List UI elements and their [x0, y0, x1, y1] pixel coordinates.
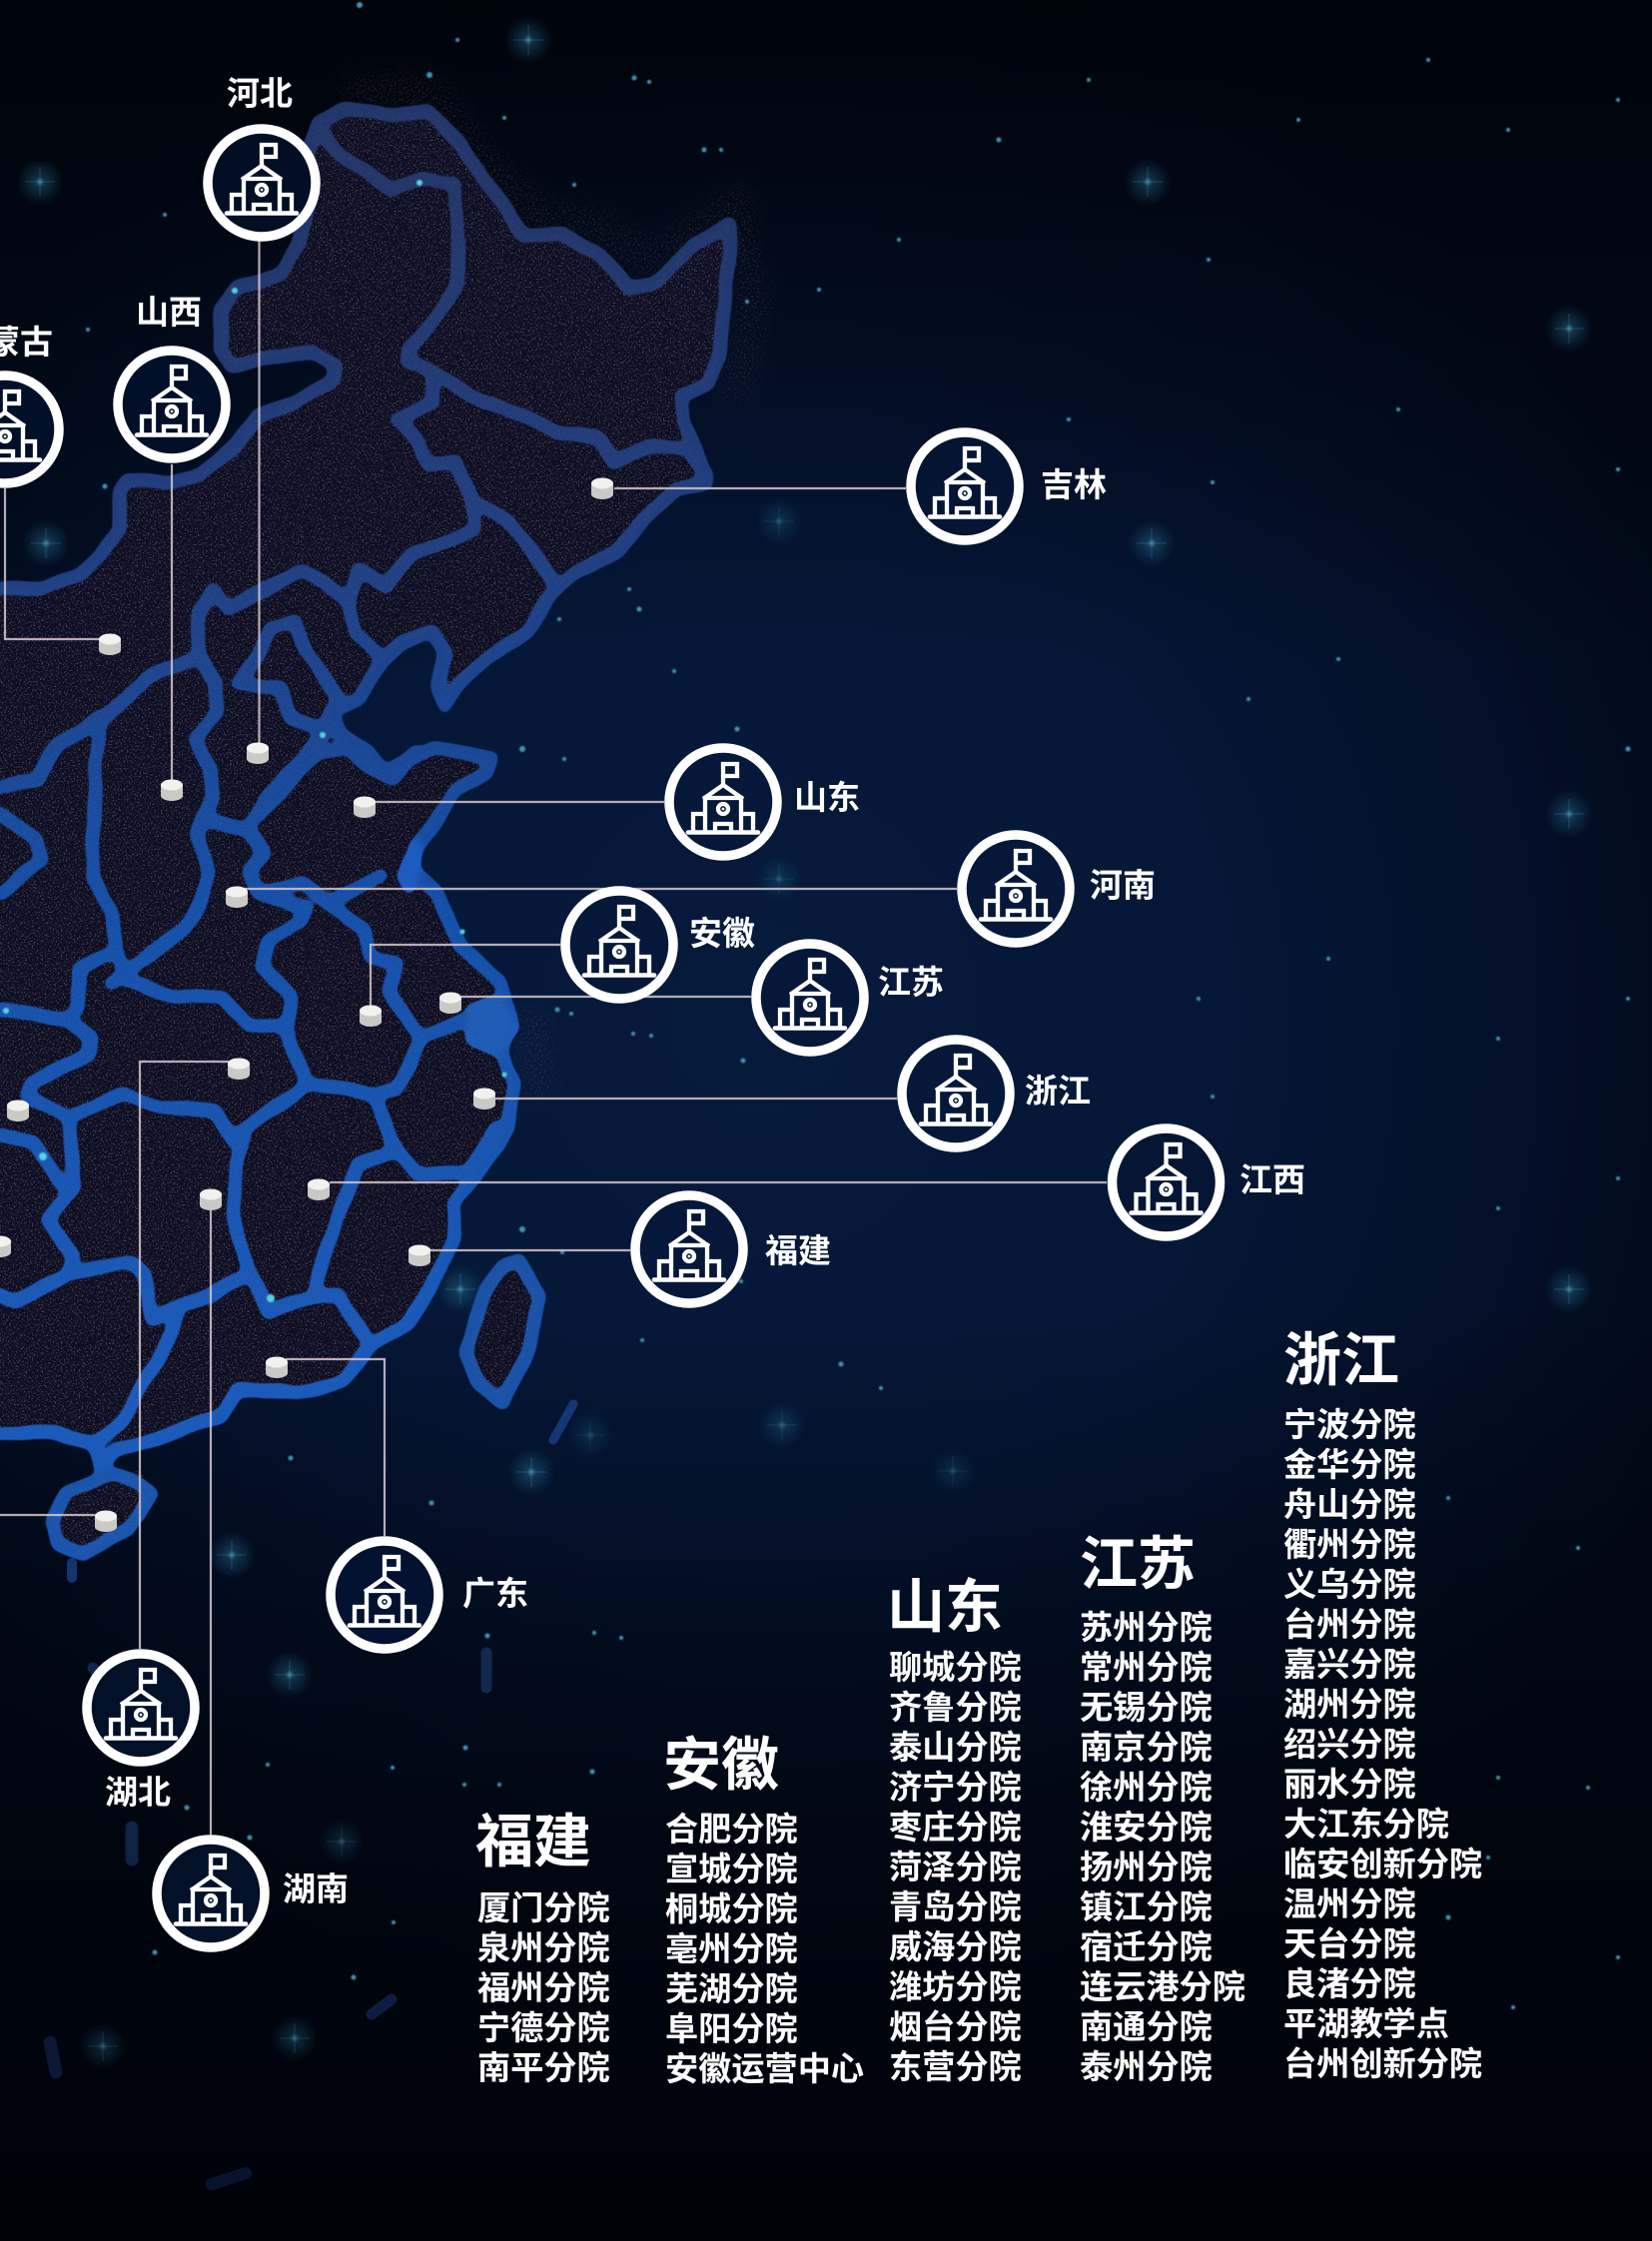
marker: 广东 [331, 1541, 528, 1649]
branch list: 浙江: 宁波分院 [1283, 1407, 1416, 1444]
branch list: 浙江: 良渚分院 [1283, 1966, 1416, 2003]
marker: 山西: 山西 [136, 294, 202, 331]
branch list: 山东: 烟台分院 [889, 2008, 1022, 2046]
branch list: 安徽: 亳州分院 [665, 1931, 798, 1968]
marker: 河南 [962, 835, 1156, 943]
branch list: 浙江: 台州分院 [1283, 1606, 1416, 1644]
branch list: 江苏: 徐州分院 [1080, 1770, 1213, 1807]
map of eastern China [0, 0, 799, 2184]
branch list: 浙江: 温州分院 [1283, 1886, 1416, 1923]
branch list: 江苏: 淮安分院 [1080, 1810, 1213, 1847]
marker: 湖北: 湖北 [105, 1774, 171, 1811]
branch list: 山东: 青岛分院 [889, 1889, 1022, 1926]
branch list: 浙江: 舟山分院 [1283, 1487, 1416, 1524]
marker: 安徽: 安徽 [689, 915, 755, 952]
branch list: 安徽: 宣城分院 [665, 1852, 798, 1888]
connector lines [0, 241, 1107, 1835]
branch list: 山东: 菏泽分院 [889, 1850, 1022, 1886]
branch list: 安徽: 合肥分院 [665, 1812, 798, 1849]
marker: 山东: 山东 [794, 779, 860, 816]
marker: 山西 [118, 294, 226, 458]
branch list: 江苏: 泰州分院 [1080, 2049, 1213, 2086]
branch list: 江苏: 苏州分院 [1080, 1610, 1213, 1647]
branch list: 江苏: 扬州分院 [1080, 1850, 1213, 1886]
branch list: 山东: 泰山分院 [889, 1730, 1022, 1767]
land fill with speckle [0, 100, 759, 1578]
branch list: 山东 [887, 1575, 1022, 2086]
branch list: 安徽: 安徽 [663, 1733, 779, 1798]
marker: 山东 [669, 748, 860, 856]
branch list: 福建: 福建 [475, 1810, 591, 1874]
branch list: 山东: 潍坊分院 [889, 1969, 1022, 2006]
branch list: 福建 [475, 1810, 610, 2087]
branch list: 浙江: 临安创新分院 [1283, 1847, 1482, 1883]
branch list: 福建: 泉州分院 [477, 1930, 610, 1967]
cyan sparkle points [3, 180, 507, 1302]
branch list: 浙江: 湖州分院 [1283, 1687, 1416, 1724]
branch list: 江苏: 南京分院 [1080, 1730, 1213, 1767]
speckled halo on northeast coast [336, 65, 775, 1107]
speckle over map [0, 100, 759, 1578]
branch list: 山东: 枣庄分院 [889, 1810, 1022, 1847]
marker: 河北: 河北 [227, 75, 293, 112]
marker: 内蒙古 [0, 324, 59, 483]
marker: 江西 [1113, 1128, 1305, 1236]
branch list: 江苏: 宿迁分院 [1080, 1929, 1213, 1966]
marker: 浙江 [902, 1040, 1091, 1147]
location pins [0, 477, 613, 1532]
branch list: 浙江: 平湖教学点 [1283, 2006, 1449, 2043]
Taiwan and outlying islands [50, 1404, 573, 2184]
branch list: 浙江 [1283, 1328, 1482, 2083]
branch list: 浙江: 绍兴分院 [1283, 1727, 1416, 1764]
branch list: 浙江: 丽水分院 [1283, 1767, 1416, 1804]
branch list: 山东: 济宁分院 [889, 1770, 1022, 1807]
branch list: 浙江: 大江东分院 [1283, 1807, 1449, 1844]
branch list: 山东: 东营分院 [889, 2049, 1022, 2086]
marker: 河北 [208, 75, 316, 237]
branch list: 福建: 福州分院 [477, 1970, 610, 2007]
marker: 江苏: 江苏 [878, 964, 944, 1001]
marker: 浙江: 浙江 [1025, 1073, 1091, 1110]
marker: 福建: 福建 [765, 1232, 831, 1269]
branch list: 浙江: 金华分院 [1283, 1447, 1416, 1484]
marker: 河南: 河南 [1090, 867, 1156, 904]
branch list: 安徽: 阜阳分院 [665, 2011, 798, 2048]
branch list: 安徽: 桐城分院 [665, 1891, 798, 1928]
marker: 江苏 [756, 944, 944, 1052]
branch list: 福建: 宁德分院 [477, 2010, 610, 2047]
branch list: 浙江: 天台分院 [1283, 1925, 1416, 1963]
branch list: 福建: 南平分院 [477, 2050, 610, 2087]
branch list: 江苏 [1080, 1532, 1245, 2086]
marker: 安徽 [565, 891, 755, 999]
branch list: 江苏: 江苏 [1080, 1532, 1196, 1597]
branch list: 浙江: 台州创新分院 [1283, 2045, 1482, 2083]
branch list: 浙江: 义乌分院 [1283, 1567, 1416, 1604]
branch list: 江苏: 无锡分院 [1080, 1690, 1213, 1727]
marker: 吉林: 吉林 [1041, 466, 1107, 503]
branch list: 江苏: 常州分院 [1080, 1650, 1213, 1687]
marker: 湖北 [87, 1654, 195, 1811]
marker: 福建 [635, 1195, 831, 1303]
marker: 吉林 [911, 432, 1107, 540]
marker: 湖南: 湖南 [283, 1870, 349, 1907]
branch list: 江苏: 南通分院 [1080, 2009, 1213, 2046]
marker: 湖南 [157, 1840, 349, 1947]
branch list: 山东: 聊城分院 [889, 1650, 1022, 1687]
branch list: 安徽: 芜湖分院 [665, 1971, 798, 2008]
branch list: 浙江: 衢州分院 [1283, 1527, 1416, 1564]
branch list: 安徽: 安徽运营中心 [665, 2051, 864, 2088]
branch list: 福建: 厦门分院 [477, 1890, 610, 1927]
branch list: 浙江: 浙江 [1283, 1328, 1399, 1393]
marker: 江西: 江西 [1239, 1161, 1305, 1198]
coastline and province borders [0, 110, 729, 1554]
marker: 广东: 广东 [462, 1575, 528, 1612]
branch list: 山东: 威海分院 [889, 1929, 1022, 1966]
branch list: 江苏: 连云港分院 [1080, 1969, 1245, 2006]
branch list: 山东: 齐鲁分院 [889, 1690, 1022, 1727]
branch list: 江苏: 镇江分院 [1080, 1889, 1213, 1926]
branch list: 安徽 [663, 1733, 864, 2088]
branch list: 山东: 山东 [887, 1575, 1003, 1640]
branch list: 浙江: 嘉兴分院 [1283, 1647, 1416, 1684]
